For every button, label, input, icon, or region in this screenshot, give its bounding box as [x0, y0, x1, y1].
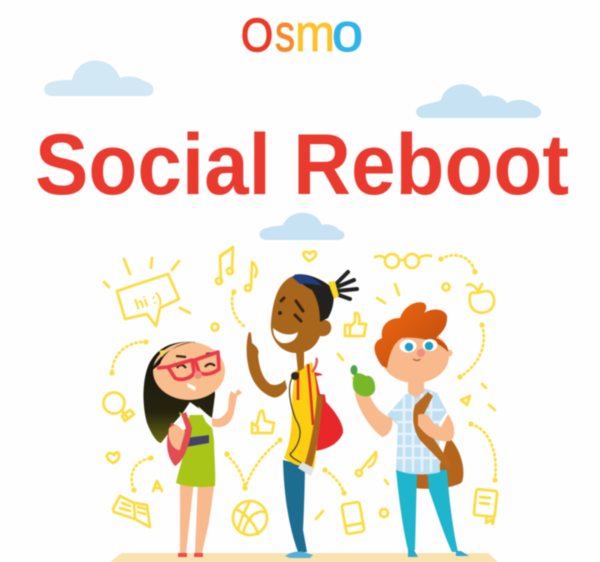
dotted path: top right — [441, 255, 475, 272]
boy3 legs — [396, 470, 458, 552]
boy3 strap — [413, 392, 452, 468]
boy2 strap — [312, 358, 317, 372]
icon: phone — [342, 502, 364, 534]
logo: Osmo — [241, 3, 363, 63]
boy2 smile — [273, 328, 298, 343]
boy2 head — [271, 276, 331, 353]
cloud: top right — [416, 84, 541, 118]
boy3 nose — [417, 349, 425, 357]
icon: heart left — [107, 452, 119, 463]
icon: thumb up left — [252, 411, 274, 433]
girl face — [153, 342, 225, 400]
girl dress — [176, 412, 215, 487]
girl belt — [186, 435, 209, 447]
ground band — [110, 553, 498, 562]
cloud: top left — [44, 60, 153, 96]
dotted path: right — [460, 325, 484, 377]
icon: hi speech bubble: hi :) — [133, 289, 164, 314]
logo: Osmo: O — [241, 9, 273, 61]
boy2 eyes and brows — [281, 298, 303, 321]
boy2 hair — [294, 274, 334, 322]
character: girl — [143, 342, 242, 557]
icon: thumb up right — [345, 313, 366, 336]
boy2 shoe — [285, 551, 313, 558]
icon: heart top — [303, 251, 316, 261]
boy2 raised arm — [247, 332, 287, 397]
boy3 hair — [374, 302, 448, 368]
icon: bookmark book — [474, 489, 497, 524]
dash strokes middle — [316, 284, 399, 519]
logo: Osmo: s — [275, 5, 295, 63]
girl mouth — [187, 383, 196, 391]
boy3 shoes — [408, 550, 469, 557]
boy2 backpack — [314, 372, 343, 451]
dots at path ends — [109, 256, 498, 496]
girl hair clip — [159, 349, 168, 357]
dotted path: upper middle — [232, 293, 244, 326]
boy3 shirt plaid — [392, 390, 444, 472]
girl arm — [169, 424, 185, 450]
rays by glasses — [377, 298, 385, 303]
boy2 legs — [283, 460, 307, 552]
small ring: left — [212, 324, 218, 330]
girl hair — [143, 342, 215, 443]
character: boy with apple — [350, 302, 469, 557]
boy3 neck — [408, 378, 424, 398]
character: boy with ponytail — [247, 272, 357, 558]
dotted path: phone arrow — [325, 470, 344, 493]
icon: music note lower — [356, 452, 376, 476]
boy3 eyes — [400, 340, 416, 352]
girl eyebrows — [176, 353, 215, 357]
dotted path: lower right — [471, 424, 496, 479]
girl shoes — [178, 553, 203, 557]
small ring: lower — [380, 509, 388, 517]
icon: letter A — [153, 481, 162, 491]
logo: Osmo: o — [332, 3, 363, 63]
boy2 cable and earbud — [289, 378, 306, 468]
boy3 apple — [350, 365, 375, 396]
girl legs — [180, 480, 215, 553]
boy2 ponytail — [336, 272, 357, 299]
girl shirt — [173, 406, 212, 430]
boy3 apple arm — [355, 384, 393, 437]
icon: magnifier — [104, 392, 134, 421]
icon: glasses top — [375, 254, 431, 268]
boy2 sleeve — [316, 375, 327, 395]
boy3 hand arm — [418, 414, 454, 441]
icon: basketball — [233, 501, 267, 535]
dotted path: left — [112, 342, 145, 372]
boy2 hand detail — [298, 462, 314, 476]
icon: hi speech bubble — [104, 258, 190, 326]
boy2 neck — [296, 352, 304, 372]
boy3 backpack — [415, 436, 463, 489]
dash strokes right — [482, 384, 495, 410]
icon: triangle — [461, 396, 470, 405]
cloud: below title — [260, 213, 345, 240]
icon: apple — [467, 284, 494, 313]
girl glasses — [157, 352, 219, 379]
dotted path: left lower — [132, 458, 151, 490]
boy3 mouth — [413, 359, 420, 360]
boy3 head — [381, 329, 449, 383]
boy3 shirt — [387, 388, 447, 474]
icon: music notes — [216, 247, 257, 291]
girl nose — [194, 371, 202, 379]
dotted paths: V shape — [226, 440, 281, 488]
boy2 right arm — [304, 395, 323, 470]
girl backpack — [167, 412, 192, 466]
girl eyes smiling — [177, 364, 215, 368]
boy2 shirt stripes — [298, 364, 313, 425]
icon: open book — [113, 496, 150, 527]
boy2 shirt — [284, 362, 318, 468]
small ring: top right — [442, 284, 450, 290]
girl waving arm — [212, 389, 242, 427]
title: Social Reboot — [35, 117, 569, 213]
doodles: yellow icons — [104, 247, 497, 535]
logo: Osmo: m — [295, 5, 335, 63]
